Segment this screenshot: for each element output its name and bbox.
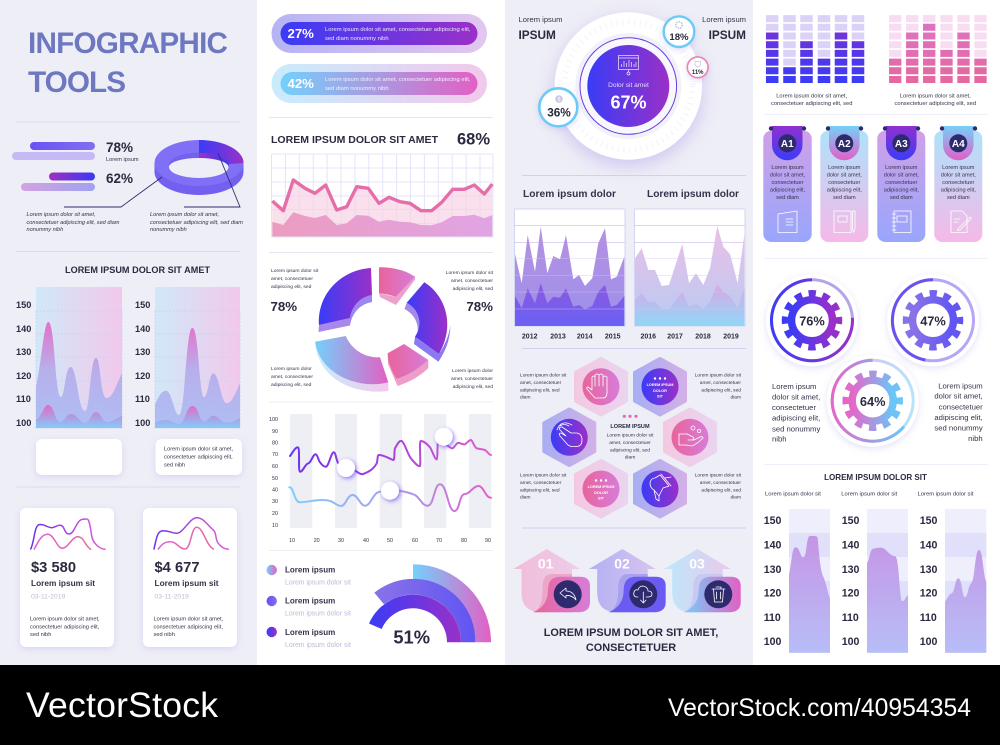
card A4: Lorem ipsum: [942, 165, 975, 171]
ring chart captions: nonummy nibh: [150, 227, 187, 233]
gauge: gear 76%: 76%: [799, 314, 825, 328]
y axis labels: 100: [920, 636, 937, 648]
panel: stat card $4 677: Lorem ipsum sit: [154, 578, 219, 588]
donut labels: Lorem ipsum dolor: [452, 368, 493, 374]
pill: 27%: Lorem ipsum dolor sit amet, consectetuer adipiscing elit,: [325, 27, 471, 33]
chart 2012-2015: 2015: [605, 334, 621, 340]
bubble 18%: 18%: [669, 32, 689, 43]
card A1: consectetuer: [771, 180, 804, 186]
panel: dual line chart: [269, 414, 491, 544]
gauge: gear 47%: [887, 274, 979, 366]
card A3: adipiscing elit,: [884, 187, 919, 193]
axis labels: 40: [272, 488, 278, 494]
axis labels: 60: [272, 464, 278, 470]
panel: stat card $3 580: 03-11-2019: [31, 594, 65, 600]
gauge caption right: nibh: [968, 434, 983, 443]
axis labels: [269, 417, 491, 544]
card A2: [820, 126, 868, 242]
donut labels: adipiscing elit, sed: [453, 384, 493, 390]
y axis labels: 100: [16, 418, 31, 428]
y axis labels: 150: [135, 300, 150, 310]
center text: Lorem ipsum dolor sit: [607, 433, 654, 439]
pill: 27%: sed diam nonummy nibh: [325, 36, 389, 42]
pill: 42%: [272, 64, 487, 103]
y axis labels: 140: [135, 324, 150, 334]
y axis labels: 110: [764, 612, 781, 624]
radial bars 51%: 51%: [393, 626, 430, 648]
hexagon: megaphone: [634, 460, 686, 517]
y axis labels: 150: [920, 515, 937, 527]
heading: LOREM IPSUM DOLOR SIT AMET,: [544, 627, 718, 639]
y axis labels: 100: [842, 636, 859, 648]
center text: LOREM IPSUM: [610, 424, 650, 430]
y axis labels: 100: [764, 636, 781, 648]
sub-labels: Lorem ipsum dolor sit: [765, 492, 821, 498]
heading: LOREM IPSUM DOLOR SIT: [824, 473, 927, 482]
sub-labels: [765, 492, 974, 498]
gauge caption right: Lorem ipsum: [938, 381, 983, 390]
side captions: adipiscing elit, sed: [520, 487, 560, 493]
panel: block bar chart pink: consectetuer adipiscing elit, sed: [895, 101, 976, 107]
card A1: A1: [781, 139, 794, 150]
pill: 27%: [272, 14, 487, 53]
purple line: [290, 440, 491, 474]
y axis labels: 120: [135, 371, 150, 381]
chart 2016-2019: [634, 209, 745, 340]
donut labels: adipiscing elit, sed: [453, 286, 493, 292]
pill: 42%: 42%: [288, 76, 314, 91]
card A3: [877, 126, 925, 242]
side captions: amet, consectetuer: [520, 480, 562, 486]
axis labels: 10: [289, 538, 295, 544]
value: 68%: [457, 130, 490, 148]
donut labels: amet, consectetuer: [451, 376, 493, 382]
panel: legend: Lorem ipsum: [285, 597, 335, 606]
panel: triple band charts: [764, 473, 986, 653]
panel: legend: Lorem ipsum: [285, 628, 335, 637]
gauge caption right: sed nonummy: [934, 424, 983, 433]
panel: radial dial 67%: 67%: [610, 92, 647, 112]
axis labels: 80: [461, 538, 467, 544]
heading: [544, 627, 718, 654]
card A1: adipiscing elit,: [770, 187, 806, 193]
highlight markers: [337, 428, 453, 500]
panel: block bar chart purple: consectetuer adipiscing elit, sed: [771, 101, 852, 107]
band chart 2: [867, 509, 908, 653]
panel: radial dial 67%: Dolor sit amet: [608, 82, 649, 89]
axis labels: 90: [272, 429, 278, 435]
hexagon: offering hand: [664, 409, 716, 466]
side captions: diam: [730, 495, 741, 501]
donut values: [270, 299, 493, 314]
panel: stat card $3 580: Lorem ipsum dolor sit amet,: [30, 617, 100, 623]
y axis labels: 130: [842, 564, 859, 576]
donut labels: Lorem ipsum dolor sit: [446, 270, 494, 276]
side captions: Lorem ipsum dolor sit: [520, 473, 567, 479]
headings: Lorem ipsum dolor: [523, 189, 616, 200]
area chart right: [155, 287, 240, 428]
y axis labels: 110: [135, 394, 150, 404]
axis labels: 70: [272, 452, 278, 458]
donut labels: amet, consectetuer: [451, 278, 493, 284]
y axis labels: 120: [842, 588, 859, 600]
right label: [702, 15, 746, 42]
axis labels: 30: [338, 538, 344, 544]
gauge caption right: dolor sit amet,: [934, 392, 983, 401]
side captions: Lorem ipsum dolor sit: [520, 373, 567, 379]
bubble 36%: 36%: [547, 106, 571, 120]
axis labels: 40: [363, 538, 369, 544]
dial base: [555, 12, 702, 160]
card A4: dolor sit amet,: [941, 173, 976, 179]
pill: 42%: Lorem ipsum dolor sit amet, consectetuer adipiscing elit,: [325, 77, 471, 83]
left label: IPSUM: [518, 28, 556, 42]
sub-labels: Lorem ipsum dolor sit: [918, 492, 974, 498]
chart 2016-2019: 2016: [641, 334, 656, 340]
panel: stat card $3 580: sed nibh: [30, 632, 51, 638]
arrow 02: [589, 549, 666, 612]
headings: [523, 189, 739, 200]
panel: yearly area charts: [514, 189, 745, 340]
side captions: Lorem ipsum dolor sit: [695, 473, 742, 479]
card A4: adipiscing elit,: [941, 187, 976, 193]
panel: legend: Lorem ipsum dolor sit: [285, 580, 351, 586]
side captions: [520, 373, 742, 501]
panel: hexagon cluster: [520, 358, 742, 517]
band chart 1: [789, 509, 830, 653]
gauge caption left: consectetuer: [772, 403, 816, 412]
donut labels: [271, 268, 494, 390]
side captions: adipiscing elit, sed: [701, 487, 741, 493]
panel: stat card $3 580: Lorem ipsum sit: [31, 578, 95, 588]
donut labels: amet, consectetuer: [271, 276, 313, 282]
donut values: 78%: [466, 299, 493, 314]
y axis labels: 140: [16, 324, 31, 334]
side captions: amet, consectetuer: [700, 380, 741, 386]
card A3: dolor sit amet,: [884, 173, 919, 179]
y axis labels: 130: [135, 347, 150, 357]
side captions: Lorem ipsum dolor sit: [695, 373, 742, 379]
panel: stat card $3 580: $3 580: [31, 560, 76, 576]
ring chart captions: Lorem ipsum dolor sit amet,: [150, 212, 219, 218]
axis labels: 30: [272, 499, 278, 505]
right label: IPSUM: [709, 28, 746, 42]
y axis labels: 140: [842, 540, 859, 552]
arrow 01: [513, 549, 590, 612]
center text: amet, consectetuer: [609, 440, 651, 446]
left label: [518, 15, 562, 42]
card A2: consectetuer: [828, 180, 860, 186]
panel: stat card $3 580: [20, 508, 114, 647]
icon: presentation board: [618, 56, 638, 75]
text card: [156, 439, 242, 475]
ring chart captions: [26, 212, 243, 233]
card A1: Lorem ipsum: [771, 165, 804, 171]
card A2: A2: [838, 139, 851, 150]
gauge caption left: dolor sit amet,: [772, 392, 820, 401]
axis labels: 50: [387, 538, 393, 544]
center text: diam: [625, 455, 635, 461]
side captions: adipiscing elit, sed: [701, 387, 741, 393]
gauge caption right: adipiscing elit,: [934, 413, 983, 422]
panel: legend: Lorem ipsum: [285, 566, 335, 574]
ring chart captions: consectetuer adipiscing elit, sed diam: [150, 220, 243, 226]
hexagon: label top: [634, 358, 686, 415]
card A3: sed diam: [890, 195, 913, 201]
side captions: diam: [520, 395, 530, 401]
panel: block bar chart purple: Lorem ipsum dolor sit amet,: [776, 94, 848, 100]
bubble 11%: [687, 57, 708, 78]
y axis labels: 150: [764, 515, 781, 527]
axis labels: 50: [272, 476, 278, 482]
ring chart captions: Lorem ipsum dolor sit amet,: [26, 212, 96, 218]
y axis labels: 150: [842, 515, 859, 527]
text card: sed nibh: [164, 462, 185, 468]
chart 2012-2015: 2013: [550, 334, 566, 340]
axis labels: 100: [269, 417, 278, 423]
bubble 36%: [539, 88, 577, 126]
donut labels: amet, consectetuer: [271, 374, 313, 380]
panel: legend: Lorem ipsum dolor sit: [285, 642, 351, 649]
y axis labels: 150: [16, 300, 31, 310]
panel: block bar chart purple: [771, 15, 858, 107]
card A3: Lorem ipsum: [885, 165, 918, 171]
progress bars with percentages: Lorem ipsum: [106, 157, 139, 163]
gauge caption left: nibh: [772, 435, 787, 444]
axis labels: 80: [272, 440, 278, 446]
panel: twin area charts: [16, 265, 242, 475]
panel: radial dial 67%: [518, 12, 746, 160]
axis labels: 60: [412, 538, 418, 544]
progress bars with percentages: 78%: [106, 140, 133, 155]
gauge caption left: [772, 382, 820, 444]
y axis labels: 110: [16, 394, 31, 404]
heading: LOREM IPSUM DOLOR SIT AMET: [271, 134, 439, 146]
text card: Lorem ipsum dolor sit amet,: [164, 446, 233, 452]
gauge: gear 47%: 47%: [920, 314, 946, 328]
card A4: consectetuer: [942, 180, 974, 186]
y axis labels: 100: [135, 418, 150, 428]
card A4: A4: [952, 139, 965, 150]
gauge: gear 64%: 64%: [860, 394, 886, 409]
chart 2016-2019: 2019: [723, 334, 739, 340]
ring chart captions: nonummy nibh: [26, 227, 63, 233]
card A4: sed diam: [947, 195, 970, 201]
title: [28, 27, 228, 99]
hexagon: label top: DOLOR: [653, 389, 667, 393]
card A2: dolor sit amet,: [827, 173, 862, 179]
y axis labels: 140: [920, 540, 937, 552]
donut labels: Lorem ipsum dolor sit: [271, 268, 319, 274]
panel: legend: [266, 565, 351, 649]
hexagon: label bottom: DOLOR: [594, 491, 608, 495]
y axis labels: 120: [764, 588, 781, 600]
axis labels: 20: [272, 511, 278, 517]
y axis labels: [764, 515, 937, 648]
3D ring chart: [64, 140, 244, 207]
side captions: amet, consectetuer: [700, 480, 741, 486]
panel: stat card $4 677: 03-11-2019: [154, 594, 189, 600]
donut labels: Lorem ipsum dolor: [271, 366, 312, 372]
panel: legend: Lorem ipsum dolor sit: [285, 611, 351, 618]
side captions: amet, consectetuer: [520, 380, 562, 386]
heading: CONSECTETUER: [586, 642, 676, 654]
panel: block bar chart pink: [895, 15, 980, 107]
donut values: 78%: [270, 299, 297, 314]
hexagon: label top: LOREM IPSUM: [647, 383, 673, 387]
card A1: [763, 126, 812, 242]
progress bars with percentages: [12, 140, 139, 191]
gauge caption right: [934, 381, 983, 443]
footer banner: [0, 665, 1000, 745]
y axis labels: 110: [842, 612, 859, 624]
y axis labels: 120: [16, 371, 31, 381]
y axis labels: 120: [920, 588, 937, 600]
panel: stat card $4 677: [143, 508, 237, 647]
card A4: [934, 126, 982, 242]
panel: stat card $3 580: consectetuer adipiscing elit,: [30, 624, 100, 630]
donut segments: [315, 267, 450, 392]
headings: Lorem ipsum dolor: [647, 189, 739, 200]
stripes: [290, 414, 491, 528]
pill: 42%: sed diam nonummy nibh: [325, 86, 389, 92]
heading: LOREM IPSUM DOLOR SIT AMET: [65, 265, 210, 275]
axis labels: 20: [314, 538, 320, 544]
y axis labels: 110: [920, 612, 937, 624]
donut labels: adipiscing elit, sed: [271, 284, 312, 290]
arrow 01: 01: [538, 555, 554, 571]
title: INFOGRAPHIC: [28, 27, 228, 60]
panel: title and ring chart: [12, 27, 244, 233]
panel: stat card $4 677: Lorem ipsum dolor sit amet,: [154, 617, 224, 623]
donut labels: adipiscing elit, sed: [271, 382, 312, 388]
card A2: sed diam: [833, 195, 856, 201]
panel: stat card $4 677: consectetuer adipiscing elit,: [154, 624, 223, 630]
grid and area line chart: [272, 154, 493, 237]
card A1: sed diam: [776, 195, 799, 201]
y axis labels: [16, 300, 150, 428]
bubble 11%: 11%: [692, 70, 704, 76]
y axis labels: 130: [764, 564, 781, 576]
hexagon: label bottom: SIT: [598, 496, 605, 500]
area chart left: [36, 287, 122, 428]
side captions: adipiscing elit, sed: [520, 387, 560, 393]
left label: Lorem ipsum: [518, 15, 562, 24]
side captions: diam: [730, 395, 741, 401]
y axis labels: 130: [16, 347, 31, 357]
chart 2012-2015: 2014: [577, 334, 593, 340]
right label: Lorem ipsum: [702, 15, 746, 24]
bubble 36%: $: [557, 97, 561, 103]
panel: stat card $4 677: $4 677: [154, 560, 200, 576]
arrow 03: 03: [689, 555, 705, 571]
panel: arrow steps: [513, 549, 741, 654]
gauge caption left: Lorem ipsum: [772, 382, 816, 391]
card A1: dolor sit amet,: [770, 173, 806, 179]
center text: [607, 415, 654, 461]
panel: exploded 3D donut: [270, 267, 494, 392]
chart 2016-2019: 2018: [695, 334, 711, 340]
gauge caption left: adipiscing elit,: [772, 414, 820, 423]
hexagon: label top: SIT: [657, 394, 664, 398]
panel: stat card $4 677: sed nibh: [154, 632, 175, 638]
center text: adipiscing elit, sed: [610, 447, 650, 453]
hexagon: label bottom: [576, 460, 626, 517]
y axis labels: 130: [920, 564, 937, 576]
chart 2016-2019: 2017: [667, 334, 683, 340]
footer banner: VectorStock.com/40954354: [668, 695, 971, 722]
radial bars 51%: [369, 564, 491, 648]
text card: consectetuer adipiscing elit,: [164, 454, 233, 460]
bubble 18%: [664, 16, 694, 47]
gauge: gear 64%: [827, 355, 919, 447]
gauge caption left: sed nonummy: [772, 424, 820, 433]
progress bars with percentages: 62%: [106, 171, 133, 186]
card A3: consectetuer: [885, 180, 917, 186]
hexagon: label bottom: LOREM IPSUM: [588, 485, 614, 489]
gauge caption right: consectetuer: [939, 402, 983, 411]
empty card: [36, 439, 122, 475]
card A2: adipiscing elit,: [827, 187, 862, 193]
hexagon: pointing finger: [544, 409, 595, 466]
chart 2012-2015: [514, 209, 625, 340]
axis labels: 10: [272, 523, 278, 529]
arrow 02: 02: [614, 555, 630, 571]
sub-labels: Lorem ipsum dolor sit: [841, 492, 898, 498]
card A3: A3: [895, 139, 908, 150]
title: TOOLS: [28, 66, 126, 99]
panel: line chart 68%: [271, 130, 493, 237]
chart 2012-2015: 2012: [522, 334, 538, 340]
side captions: diam: [520, 495, 530, 501]
axis labels: 70: [436, 538, 442, 544]
pill: 27%: 27%: [288, 26, 314, 41]
arrow 03: [664, 549, 741, 612]
hexagon: hand: [576, 358, 626, 415]
ring chart captions: consectetuer adipiscing elit, sed diam: [26, 220, 120, 226]
panel: block bar chart pink: Lorem ipsum dolor sit amet,: [900, 94, 971, 100]
band chart 3: [945, 509, 986, 653]
blue-pink line: [289, 484, 491, 511]
card A2: Lorem ipsum: [828, 165, 861, 171]
footer banner: VectorStock: [26, 685, 218, 725]
gauge: gear 76%: [766, 274, 858, 366]
axis labels: 90: [485, 538, 491, 544]
y axis labels: 140: [764, 540, 781, 552]
